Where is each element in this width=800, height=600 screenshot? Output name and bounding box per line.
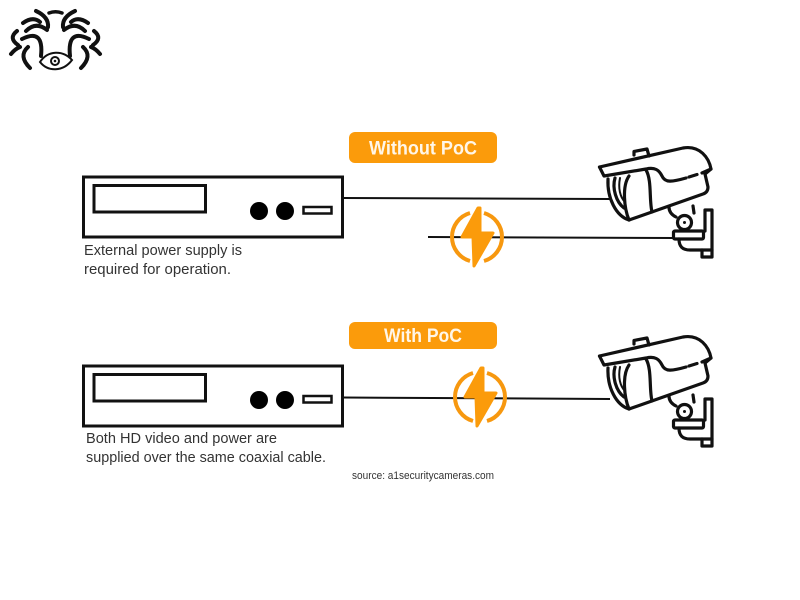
badge: With PoC: With PoC	[384, 326, 462, 347]
section: without PoC	[84, 132, 712, 278]
text: combined supply note: supplied over the same coaxial cable.	[86, 449, 326, 466]
combined cable line	[343, 398, 610, 399]
power cable line	[428, 237, 674, 238]
icon: security camera	[600, 148, 712, 257]
badge: Without PoC	[349, 132, 497, 163]
badge: With PoC	[349, 322, 497, 349]
text: combined supply note: Both HD video and power are	[86, 430, 277, 447]
icon: recorder device	[84, 177, 342, 237]
text: external power note: required for operation.	[84, 261, 231, 278]
icon: power bolt	[455, 368, 505, 426]
icon: security camera	[600, 337, 712, 446]
text: external power note: External power supply is	[84, 242, 242, 259]
icon: logo medusa eye	[11, 11, 100, 69]
video cable line	[343, 198, 610, 199]
source credit: source: a1securitycameras.com	[352, 470, 494, 482]
icon: power bolt	[452, 208, 502, 266]
icon: recorder device	[84, 366, 342, 426]
badge: Without PoC: Without PoC	[369, 138, 477, 160]
section: with PoC	[84, 322, 712, 466]
